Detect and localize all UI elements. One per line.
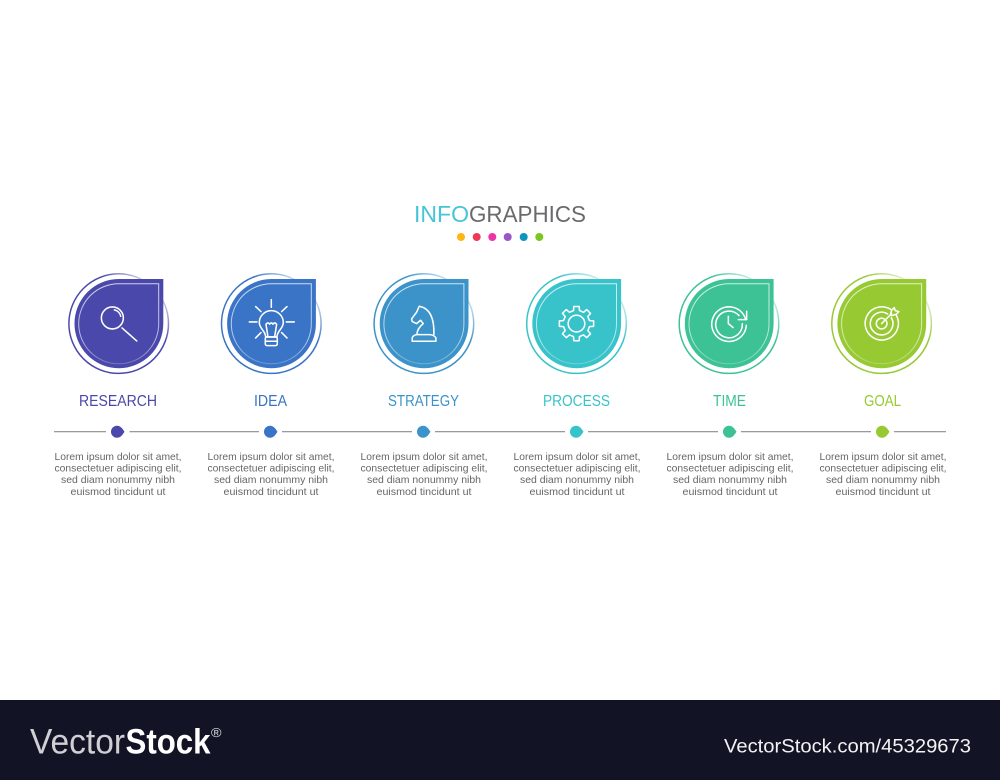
icon: magnifier <box>101 307 137 341</box>
text: process: sed diam nonummy nibh <box>520 475 634 486</box>
marker: research <box>111 426 124 438</box>
icon: clock with arrow <box>712 307 747 341</box>
text: process <box>514 452 640 498</box>
step 5: time <box>666 274 794 498</box>
text: strategy: consectetuer adipiscing elit, <box>360 464 488 475</box>
icon: target with dart <box>865 307 899 340</box>
footer logo <box>30 722 222 762</box>
text: goal: euismod tincidunt ut <box>836 487 931 498</box>
heading: goal: GOAL <box>864 393 901 410</box>
text: idea: Lorem ipsum dolor sit amet, <box>208 452 334 463</box>
icon: gear <box>559 306 594 341</box>
step 3: strategy <box>360 274 488 498</box>
heading: process: PROCESS <box>543 393 610 410</box>
text: process: consectetuer adipiscing elit, <box>514 464 640 475</box>
heading: time: TIME <box>713 393 746 410</box>
marker: time <box>723 426 736 438</box>
footer logo: Stock <box>126 722 211 762</box>
title: GRAPHICS <box>469 201 586 227</box>
marker: idea <box>264 426 278 438</box>
text: research: consectetuer adipiscing elit, <box>54 464 182 475</box>
icon: light bulb <box>249 300 294 346</box>
badge: strategy <box>374 274 474 373</box>
text: time <box>666 452 794 498</box>
marker: goal <box>876 426 890 438</box>
text: process: euismod tincidunt ut <box>530 487 625 498</box>
footer bar <box>0 700 1000 780</box>
text: goal: consectetuer adipiscing elit, <box>820 464 946 475</box>
badge: process <box>527 274 626 373</box>
badge: research <box>69 274 168 373</box>
footer logo: ® <box>211 725 222 740</box>
heading: research: RESEARCH <box>79 393 157 410</box>
marker: process <box>570 426 584 438</box>
step 6: goal <box>820 274 946 498</box>
step 2: idea <box>208 274 334 498</box>
text: idea <box>208 452 334 498</box>
text: research <box>54 452 182 498</box>
text: time: Lorem ipsum dolor sit amet, <box>666 452 794 463</box>
text: research: Lorem ipsum dolor sit amet, <box>54 452 182 463</box>
text: idea: consectetuer adipiscing elit, <box>208 464 334 475</box>
text: idea: sed diam nonummy nibh <box>214 475 328 486</box>
text: strategy: sed diam nonummy nibh <box>367 475 481 486</box>
text: time: consectetuer adipiscing elit, <box>666 464 794 475</box>
heading: idea: IDEA <box>254 393 287 410</box>
text: process: Lorem ipsum dolor sit amet, <box>514 452 640 463</box>
title: INFO <box>414 201 469 227</box>
marker: strategy <box>417 426 430 438</box>
text: research: euismod tincidunt ut <box>70 487 166 498</box>
text: goal: Lorem ipsum dolor sit amet, <box>820 452 946 463</box>
text: strategy: euismod tincidunt ut <box>376 487 472 498</box>
heading: strategy: STRATEGY <box>388 393 459 410</box>
step 1: research <box>54 274 182 498</box>
text: idea: euismod tincidunt ut <box>224 487 319 498</box>
text: research: sed diam nonummy nibh <box>61 475 175 486</box>
badge: time <box>679 274 779 373</box>
text: time: sed diam nonummy nibh <box>673 475 787 486</box>
text: time: euismod tincidunt ut <box>682 487 778 498</box>
text: goal: sed diam nonummy nibh <box>826 475 940 486</box>
title <box>414 201 586 227</box>
title colour dots <box>457 233 543 241</box>
text: strategy <box>360 452 488 498</box>
step 4: process <box>514 274 640 498</box>
text: strategy: Lorem ipsum dolor sit amet, <box>360 452 488 463</box>
footer image id: VectorStock.com/45329673 <box>724 736 971 758</box>
text: goal <box>820 452 946 498</box>
timeline line <box>54 431 946 433</box>
icon: chess knight <box>412 306 436 341</box>
footer logo: Vector <box>30 722 125 762</box>
badge: goal <box>832 274 931 373</box>
badge: idea <box>221 274 321 373</box>
